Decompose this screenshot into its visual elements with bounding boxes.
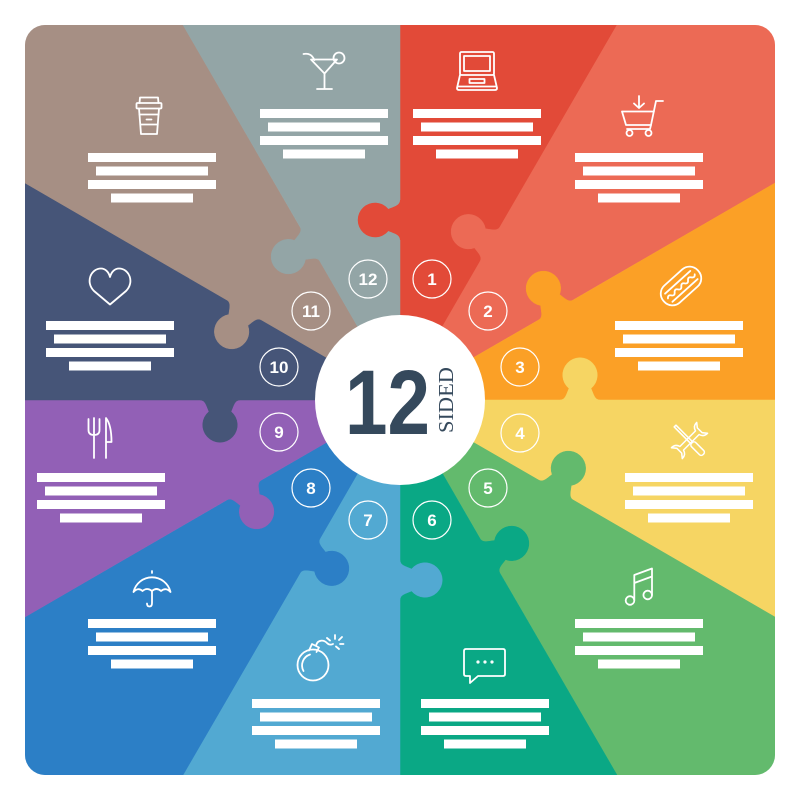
number badge 11: 11	[302, 302, 320, 321]
icon: shopping cart	[622, 96, 663, 136]
number badge 1: 1	[427, 270, 437, 289]
icon: speech bubble	[464, 649, 505, 683]
panel 5 green piece	[442, 442, 775, 775]
number badge 5: 5	[483, 479, 493, 498]
panel 2 coral piece	[442, 25, 775, 358]
text placeholder bars 8	[88, 619, 216, 668]
puzzle tab of red piece over grey piece	[358, 200, 400, 240]
text placeholder bars 2	[575, 153, 703, 202]
panel 9 purple piece	[25, 400, 326, 618]
number badge 11	[292, 292, 330, 330]
text placeholder bars 12	[260, 109, 388, 158]
panel 6 teal piece	[400, 474, 618, 775]
text placeholder bars 11	[88, 153, 216, 202]
panel 11 taupe piece	[25, 25, 358, 358]
icon: bomb	[298, 635, 344, 680]
text placeholder bars 10	[46, 321, 174, 370]
icon: cocktail glass	[304, 52, 344, 89]
number badge 7: 7	[363, 511, 373, 530]
number badge 9: 9	[274, 423, 284, 442]
number badge 10: 10	[270, 358, 288, 377]
number badge 12	[349, 260, 387, 298]
number badge 9	[260, 413, 298, 451]
number badge 12: 12	[359, 270, 377, 289]
text placeholder bars 4	[625, 473, 753, 522]
number badge 6	[413, 501, 451, 539]
panel 4 yellow piece	[474, 358, 775, 617]
text placeholder bars 7	[252, 699, 380, 748]
icon: fork and knife	[88, 418, 112, 458]
number badge 3	[501, 348, 539, 386]
number badge 5	[469, 469, 507, 507]
number badge 6: 6	[427, 511, 437, 530]
title number 12: 12	[345, 352, 430, 454]
center circle title	[315, 315, 485, 485]
text placeholder bars 9	[37, 473, 165, 522]
number badge 2: 2	[483, 302, 493, 321]
number badge 10	[260, 348, 298, 386]
text placeholder bars 5	[575, 619, 703, 668]
panel 8 blue piece	[25, 442, 358, 775]
text placeholder bars 1	[413, 109, 541, 158]
icon: music notes	[626, 568, 652, 605]
panel 7 light blue piece	[183, 474, 442, 775]
icon: laptop	[457, 52, 497, 90]
text placeholder bars 6	[421, 699, 549, 748]
number badge 4: 4	[515, 424, 525, 443]
icon: wrench and screwdriver	[671, 422, 708, 459]
icon: coffee cup	[136, 98, 162, 134]
panel 3 orange piece	[474, 182, 775, 400]
icon: hot dog	[656, 262, 706, 310]
number badge 8: 8	[306, 479, 316, 498]
icon: heart	[90, 268, 130, 304]
number badge 7	[349, 501, 387, 539]
panel 12 grey piece	[183, 25, 400, 326]
panel 10 navy piece	[25, 183, 326, 442]
icon: umbrella	[134, 571, 170, 606]
number badge 8	[292, 469, 330, 507]
number badge 3: 3	[515, 358, 525, 377]
number badge 1	[413, 260, 451, 298]
title word SIDED: SIDED	[434, 367, 458, 433]
panel 1 red piece	[400, 25, 617, 326]
number badge 2	[469, 292, 507, 330]
number badge 4	[501, 414, 539, 452]
text placeholder bars 3	[615, 321, 743, 370]
